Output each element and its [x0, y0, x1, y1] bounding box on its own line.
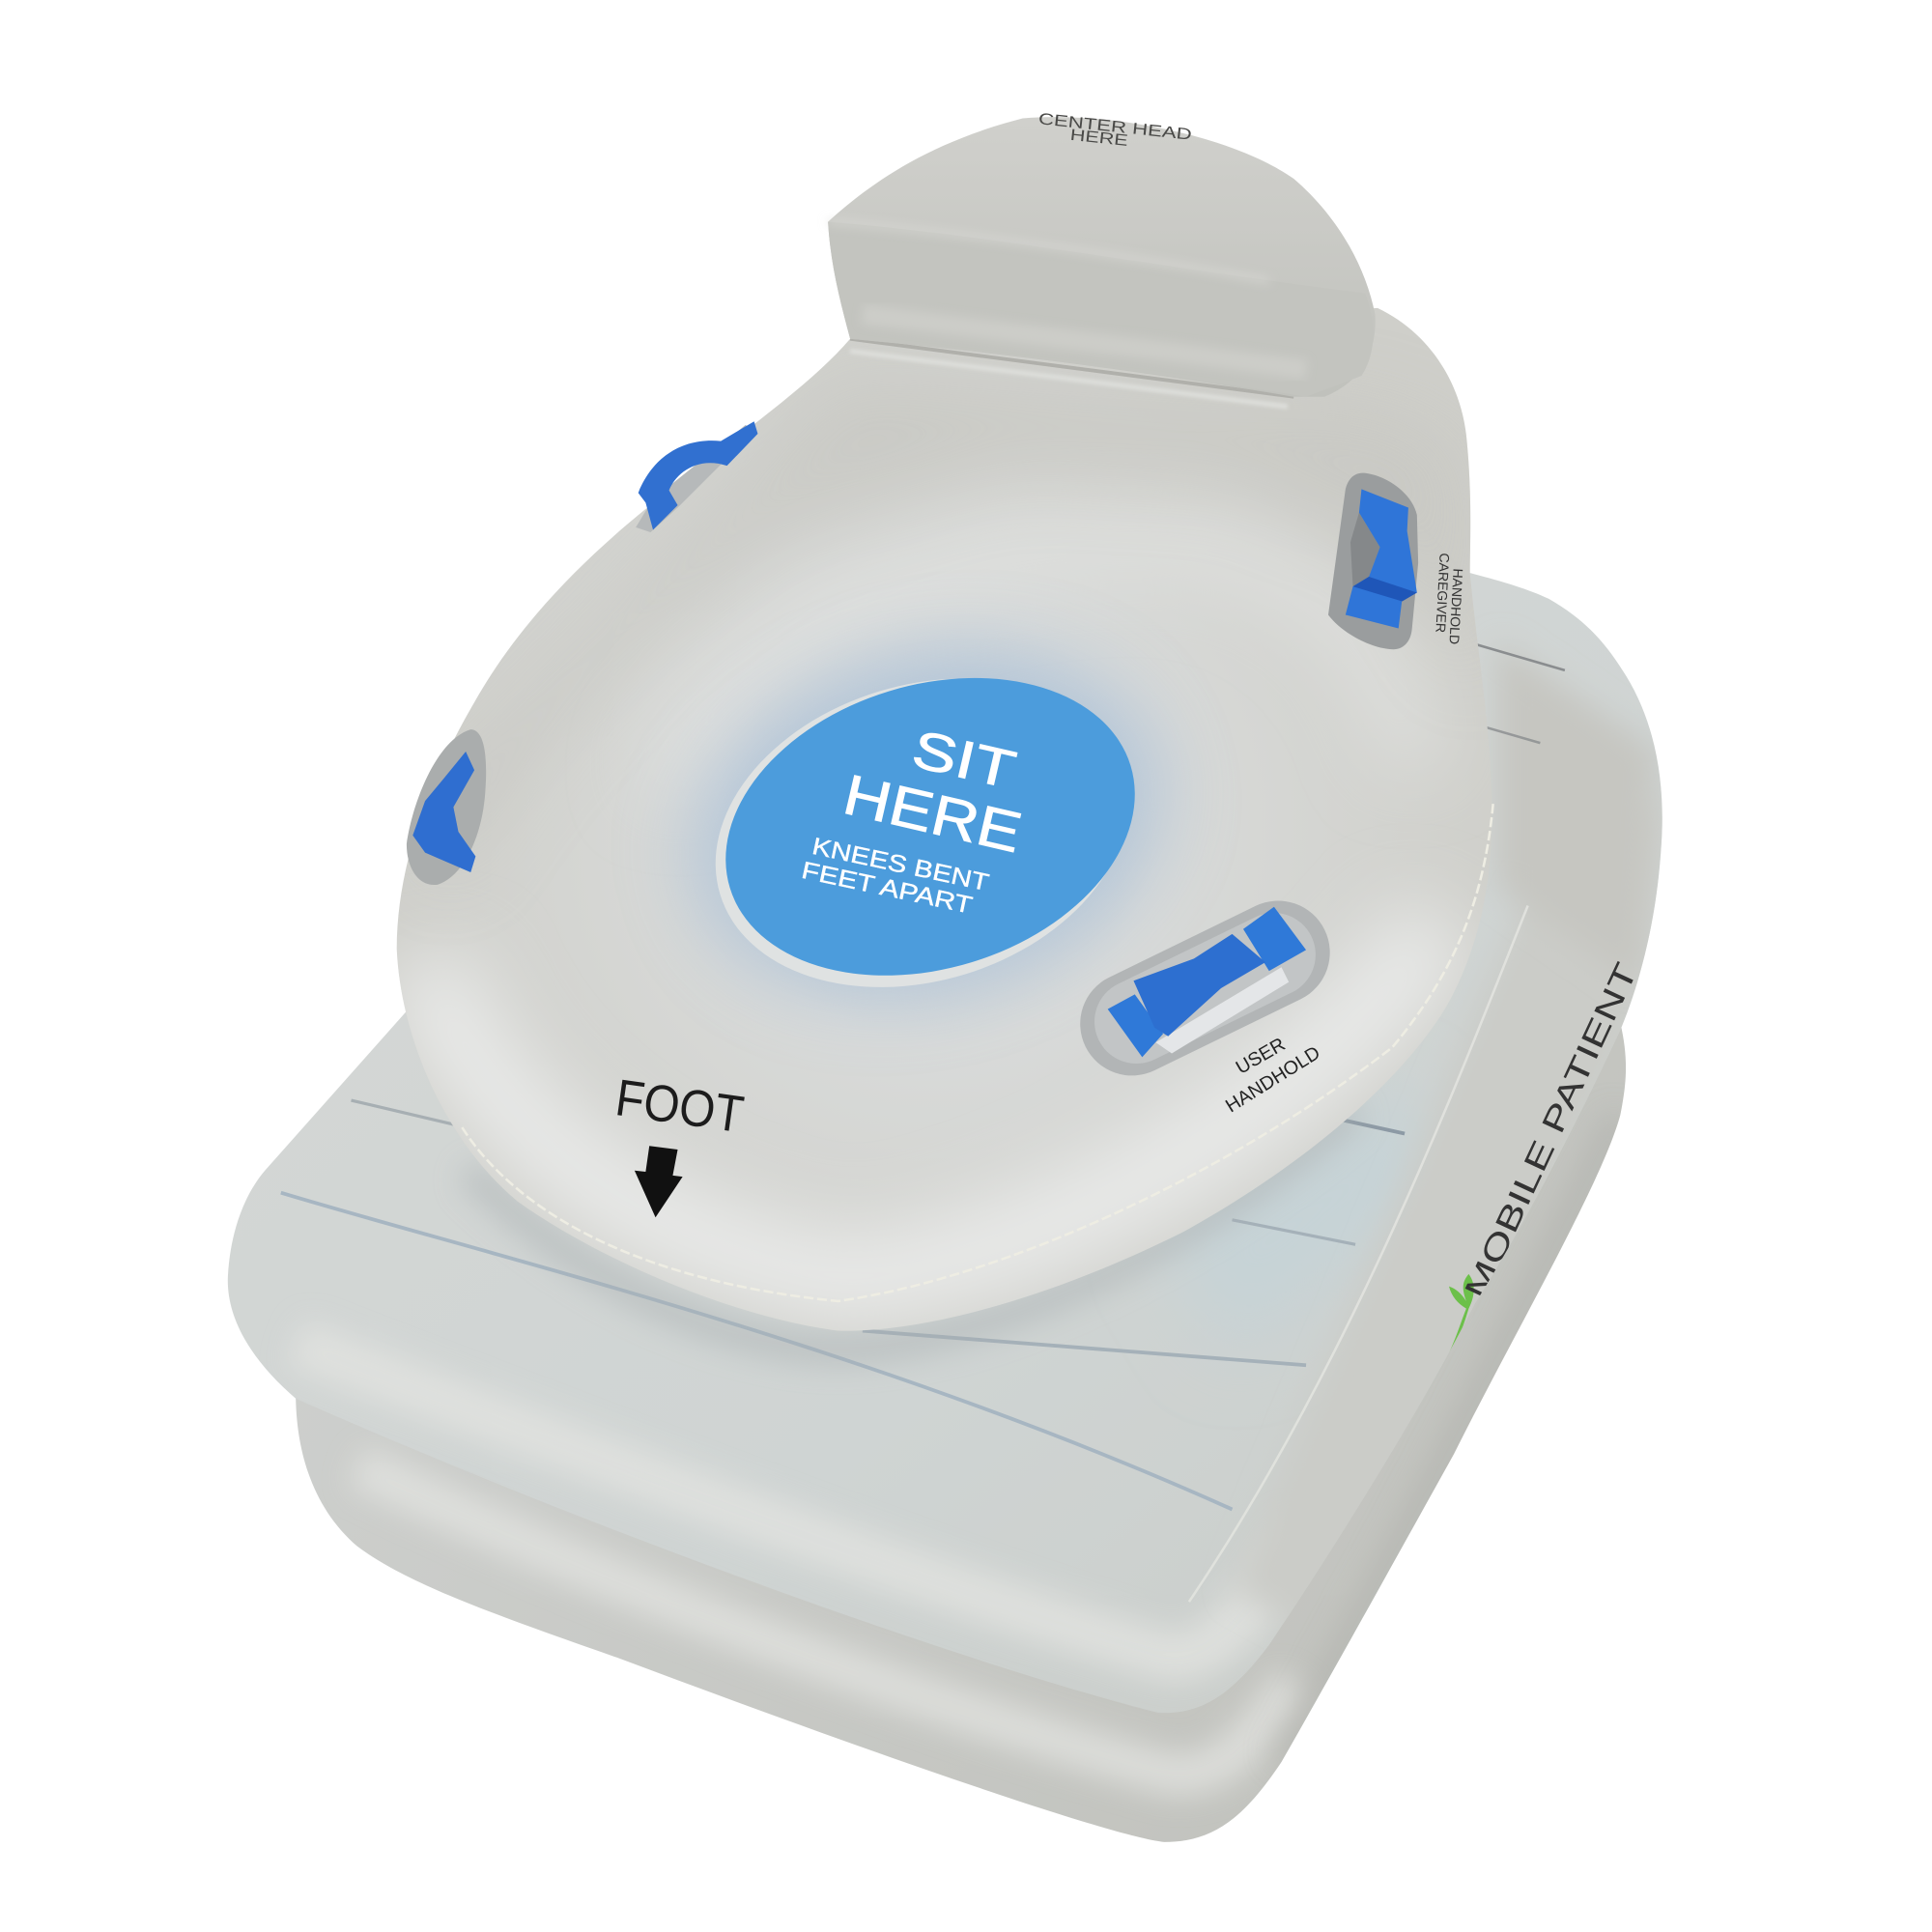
seat shadow on mattress	[469, 1109, 1355, 1350]
handle: caregiver handhold	[1328, 473, 1418, 649]
inner ring crease light	[1262, 555, 1418, 728]
text: caregiver handhold: CAREGIVER	[1433, 553, 1453, 633]
upper mattress layer	[228, 573, 1662, 1713]
arrow: foot direction	[635, 1146, 683, 1217]
handle: user handhold	[1063, 883, 1348, 1093]
text: sit here: FEET APART	[799, 857, 975, 920]
text: sit here: KNEES BENT	[810, 833, 991, 896]
bright lower rim	[425, 924, 1441, 1282]
text: mobile patient logo: MOBILE PATIENT	[1458, 957, 1645, 1304]
text: caregiver handhold: HANDHOLD	[1446, 568, 1466, 645]
text: caregiver handhold	[1433, 553, 1466, 645]
text: mobile patient logo	[1449, 957, 1645, 1353]
seam at head edge	[850, 339, 1293, 397]
text: foot: FOOT	[612, 1069, 747, 1144]
text: user handhold: HANDHOLD	[1222, 1042, 1324, 1117]
lower mattress layer	[296, 1023, 1626, 1842]
sit here blue circle	[677, 630, 1172, 1036]
text: center head here	[1037, 109, 1193, 150]
text: center head here: CENTER HEAD	[1037, 109, 1193, 144]
handle: left side	[407, 729, 486, 885]
headrest cushion	[828, 109, 1376, 397]
text: sit here: SIT	[907, 719, 1021, 800]
seams and creases	[1189, 906, 1528, 1602]
inflatable seat ring	[397, 308, 1493, 1331]
text: user handhold: USER	[1233, 1034, 1289, 1079]
text: sit here: HERE	[838, 763, 1027, 865]
blue tint around seat hole	[668, 626, 1184, 1020]
stitched welded seam	[462, 801, 1493, 1301]
handle: top left	[636, 421, 757, 532]
text: center head here: HERE	[1069, 126, 1129, 150]
darker upper rim	[688, 395, 1223, 591]
text: sit here	[799, 719, 1027, 920]
base mattress	[228, 573, 1663, 1842]
product photo: inflatable lift seat on base mattress	[228, 113, 1662, 1842]
